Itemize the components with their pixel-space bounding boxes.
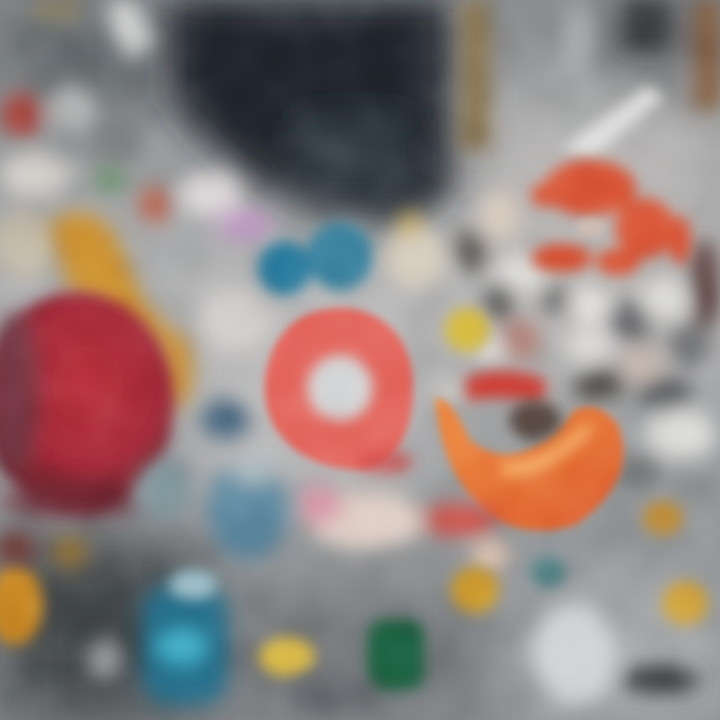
orange crescent: [435, 371, 624, 531]
green block: [368, 620, 424, 690]
lower centre pink and cream shapes: [298, 485, 510, 572]
white streak: [560, 85, 665, 160]
bottom right highlights: [285, 605, 700, 713]
pale cluster: [383, 189, 520, 290]
left scattered objects: [0, 86, 273, 440]
yellow beads bottom: [259, 501, 708, 677]
lower left objects: [0, 534, 123, 680]
blue cluster: [258, 222, 373, 295]
yellow blob behind sphere: [50, 212, 193, 410]
pink ring: [265, 308, 413, 474]
yellow bead centre: [445, 308, 489, 352]
small teal bead: [530, 556, 566, 588]
blue bottle: [142, 570, 228, 705]
red sphere: [0, 292, 174, 518]
background: vertical poles: [35, 0, 720, 150]
background: dark upper panel: [170, 0, 450, 225]
translucent blue jars: [137, 456, 288, 560]
grey and white mosaic: [432, 240, 719, 508]
orange coral cluster: [531, 160, 691, 275]
